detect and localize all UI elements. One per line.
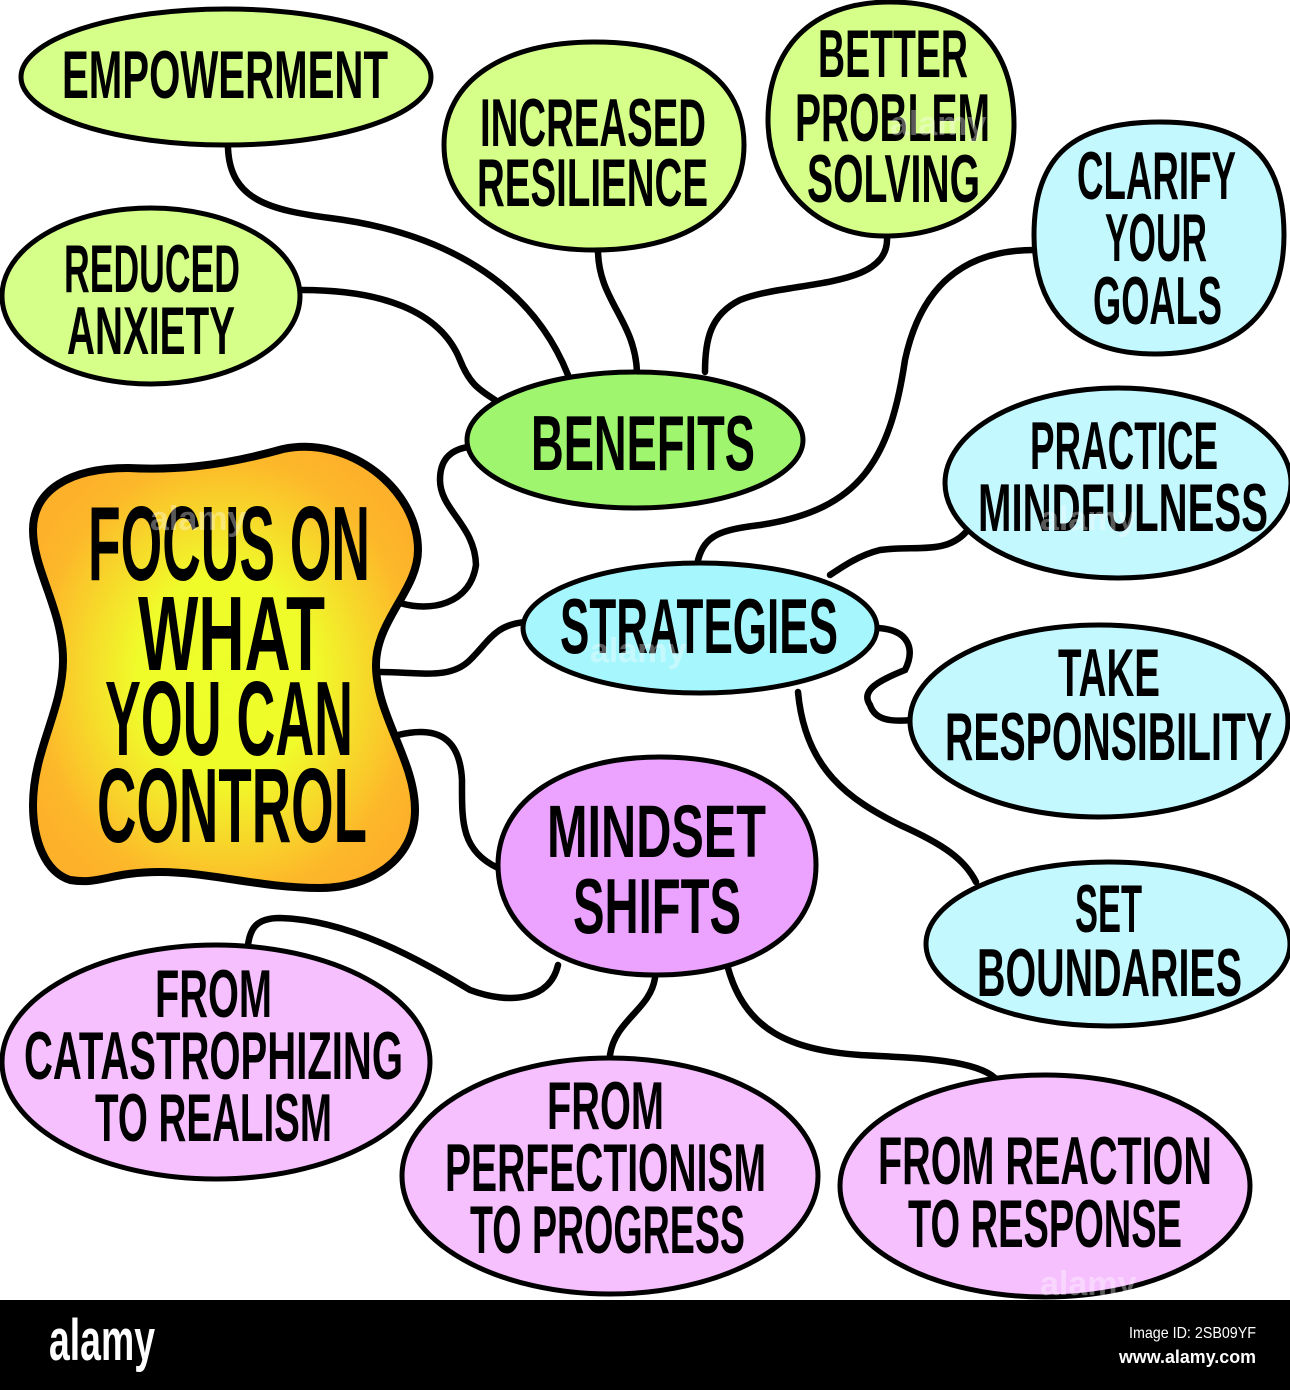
node: empowerment: EMPOWERMENT	[62, 37, 388, 113]
central title node: WHAT	[138, 575, 325, 693]
node: increased resilience: INCREASED	[480, 85, 706, 161]
node: mindset shifts: MINDSET	[547, 790, 766, 873]
node: strategies: STRATEGIES	[560, 582, 838, 670]
node: from catastrophizing to realism	[2, 945, 430, 1179]
connector: increased resilience to benefits	[598, 250, 637, 372]
node: empowerment	[21, 9, 431, 145]
node: better problem solving: BETTER	[818, 16, 968, 92]
node: from perfectionism to progress: PERFECTIONISM	[445, 1130, 766, 1206]
node: set boundaries: SET	[1075, 871, 1142, 947]
node: benefits	[467, 372, 803, 508]
node: from perfectionism to progress	[402, 1058, 818, 1294]
central title node: YOU CAN	[105, 660, 353, 778]
node: better problem solving: PROBLEM	[795, 80, 990, 156]
connector: reduced anxiety to benefits	[302, 290, 495, 400]
watermark marks: alamy	[1040, 1265, 1136, 1303]
connector: catastrophizing to mindset shifts	[248, 918, 558, 998]
watermark marks	[150, 105, 1136, 1303]
node: from perfectionism to progress: TO PROGRESS	[470, 1192, 745, 1268]
node: from perfectionism to progress: FROM	[547, 1068, 664, 1144]
node: increased resilience: RESILIENCE	[477, 145, 708, 221]
watermark marks: alamy	[890, 105, 986, 143]
footer image id: Image ID: 2SB09YF	[1129, 1325, 1256, 1342]
node: mindset shifts: SHIFTS	[573, 862, 741, 950]
connector: take responsibility to strategies	[867, 628, 912, 721]
node: reduced anxiety	[2, 208, 300, 384]
central title node: CONTROL	[97, 747, 367, 865]
watermark marks: alamy	[1040, 500, 1136, 538]
node: practice mindfulness	[945, 388, 1290, 578]
node: better problem solving: SOLVING	[807, 141, 980, 217]
watermark marks: alamy	[590, 632, 686, 670]
node: benefits: BENEFITS	[531, 399, 755, 487]
central title node: FOCUS ON	[88, 485, 370, 603]
node: from catastrophizing to realism: TO REALISM	[95, 1080, 332, 1156]
footer url: www.alamy.com	[1118, 1347, 1256, 1367]
connector: reaction to mindset shifts	[728, 968, 995, 1078]
node: from catastrophizing to realism: FROM	[155, 956, 272, 1032]
connector: practice mindfulness to strategies	[830, 532, 966, 575]
node: reduced anxiety: ANXIETY	[67, 293, 235, 369]
connector: set boundaries to strategies	[798, 692, 976, 882]
node: set boundaries	[926, 862, 1290, 1026]
node: clarify your goals	[1034, 122, 1284, 354]
node: from reaction to response	[840, 1075, 1250, 1297]
node: increased resilience	[444, 42, 744, 250]
node: reduced anxiety: REDUCED	[64, 231, 240, 307]
connector: empowerment to benefits	[228, 148, 568, 375]
central title node	[33, 447, 418, 888]
connector: title to mindset shifts	[398, 732, 498, 868]
connector: title to strategies	[378, 622, 525, 674]
node: take responsibility: TAKE	[1058, 635, 1160, 711]
footer bar	[0, 1300, 1290, 1390]
node: strategies	[523, 563, 877, 693]
connector: title to benefits	[400, 447, 476, 606]
node: take responsibility	[910, 625, 1288, 817]
connector: perfectionism to mindset shifts	[610, 978, 655, 1055]
connector: clarify your goals to strategies	[698, 250, 1034, 560]
node: from catastrophizing to realism: CATASTROPHIZING	[24, 1018, 403, 1094]
node: better problem solving	[768, 2, 1014, 236]
node: mindset shifts	[498, 757, 816, 975]
footer logo: alamy	[49, 1308, 155, 1373]
connector: better problem solving to benefits	[705, 237, 887, 372]
watermark marks: alamy	[150, 500, 246, 538]
